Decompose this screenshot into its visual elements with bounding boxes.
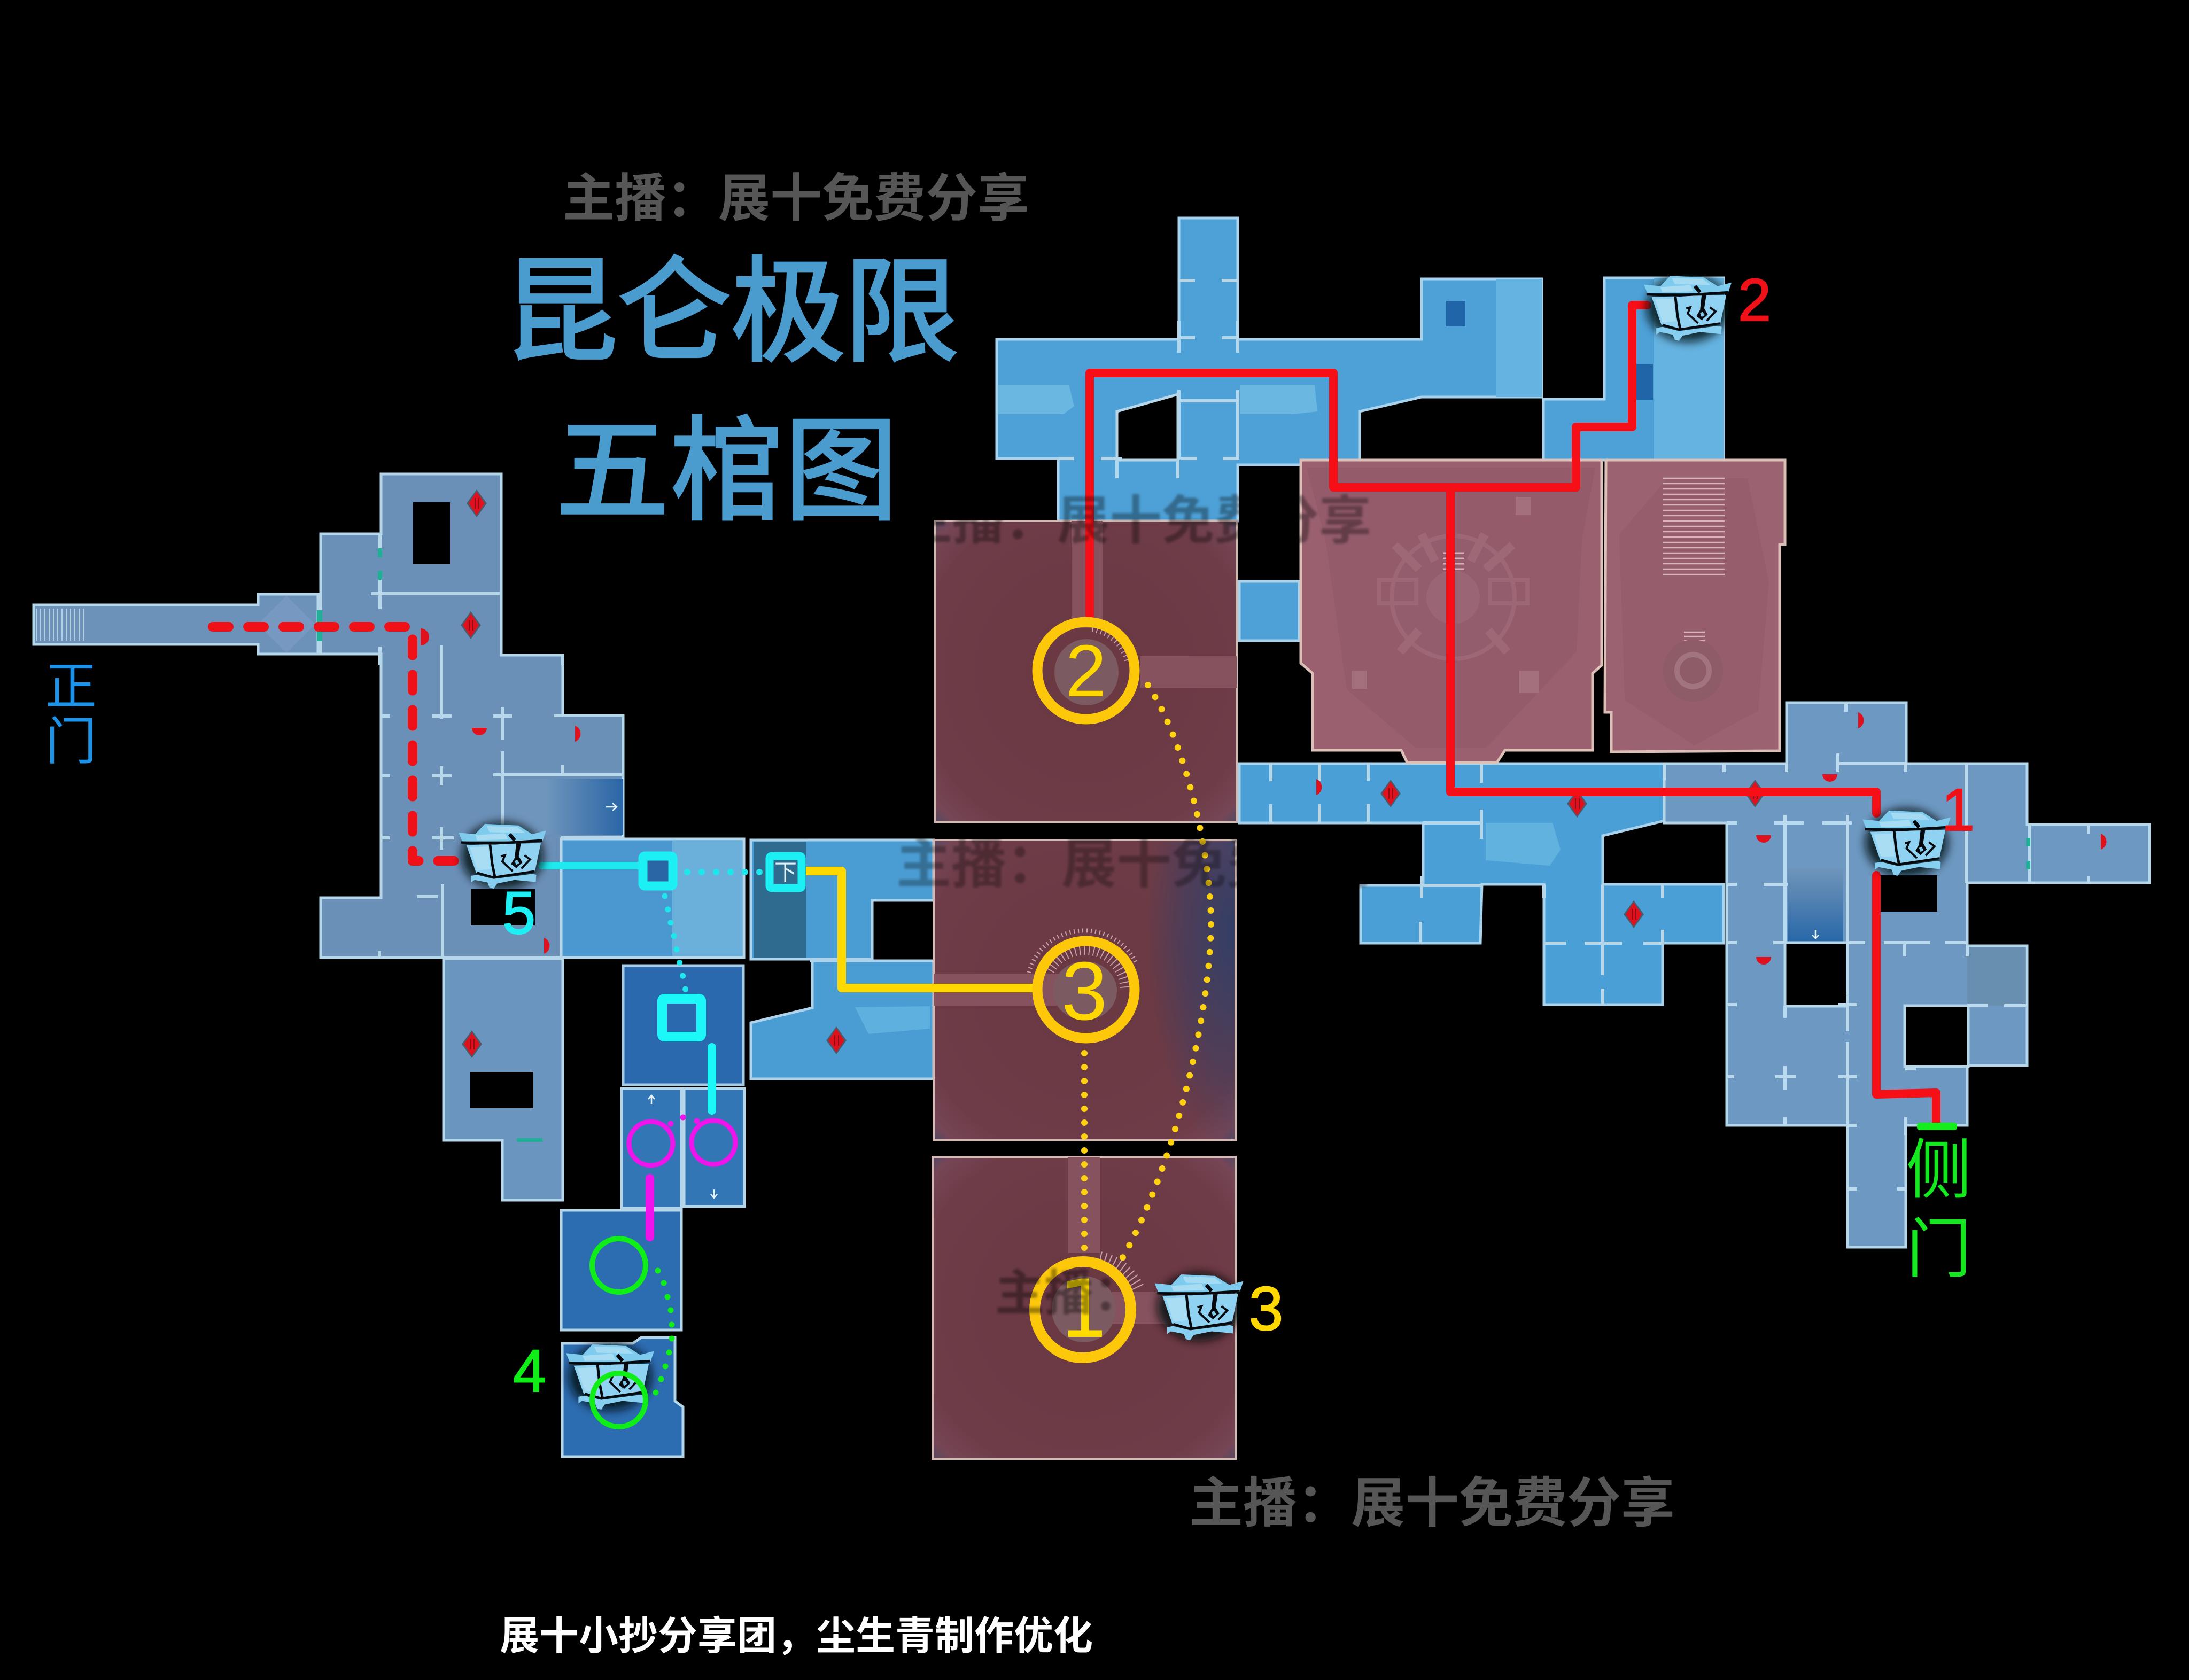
- label: main entrance: 门: [45, 700, 97, 774]
- room: bottom chamber: [562, 1337, 683, 1457]
- small arrows: [648, 1095, 717, 1198]
- markers: red half circles: [421, 628, 2106, 965]
- left building: [34, 474, 625, 1200]
- marker: yellow circle two: 2: [1066, 630, 1106, 712]
- chest: number 4: [566, 1342, 654, 1411]
- number: chest 3: 3: [1249, 1274, 1283, 1343]
- label: side door: 门: [1906, 1196, 1971, 1291]
- markers: red diamonds: [461, 489, 1765, 1058]
- top blue wing: [997, 218, 1542, 521]
- title: line two: 五棺图: [556, 379, 898, 543]
- watermark: over upper rooms: 主播：展十免费分享: [900, 478, 1371, 554]
- chest: number 5: [459, 822, 546, 890]
- room: dark right tall: [684, 1088, 744, 1207]
- right slate wing: [1664, 703, 2149, 1247]
- markers: teal doors: [317, 548, 2030, 1142]
- marker: yellow circle three: 3: [1061, 945, 1107, 1037]
- credit line: 展十小抄分享团，尘生青制作优化: [500, 1604, 1093, 1661]
- route: cyan: [542, 854, 802, 1110]
- room: lower chamber: [561, 1210, 681, 1330]
- watermark: bottom right: 主播：展十免费分享: [1189, 1460, 1675, 1538]
- route: magenta: [629, 1115, 735, 1237]
- route: yellow dotted vertical: [1081, 1053, 1088, 1250]
- watermark: top: 主播：展十免费分享: [563, 156, 1029, 231]
- room: chamber one: [933, 1157, 1236, 1459]
- marker: yellow circle one: [1035, 1262, 1131, 1358]
- cyan square two: [662, 999, 701, 1037]
- room: small square between halls: [1239, 581, 1299, 641]
- title: line one: 昆仑极限: [503, 219, 959, 385]
- corridor: right light wing: [1239, 764, 1724, 1005]
- label: main entrance: 正: [45, 645, 97, 719]
- number: chest 2: 2: [1738, 267, 1771, 333]
- route: red dashed main entrance: [213, 627, 470, 861]
- marker: yellow circle one: 1: [1058, 1263, 1109, 1356]
- room: chamber three: [934, 840, 1236, 1140]
- route: green: [592, 1239, 674, 1427]
- marker: yellow circle three: [1037, 941, 1135, 1038]
- number: chest 4: 4: [513, 1337, 546, 1404]
- cyan square three with label: 下: [774, 854, 797, 887]
- route: yellow solid: [806, 871, 1034, 988]
- chest: number 1: [1862, 808, 1951, 877]
- watermark: over lower room: 主播：: [995, 1254, 1143, 1325]
- route: yellow dotted curve: [1121, 685, 1211, 1261]
- hall: east red hall: [1605, 460, 1785, 752]
- number: chest 1: 1: [1942, 776, 1975, 843]
- cyan square three with label: [770, 854, 802, 888]
- label: side door: [1906, 1117, 1971, 1291]
- route: red side door to chests: [1090, 305, 1936, 1123]
- label: side door: 侧: [1906, 1117, 1971, 1212]
- chest: number 3: [1154, 1272, 1244, 1341]
- room: chamber two: [935, 521, 1237, 822]
- room: stairs-down hall: [751, 840, 934, 1079]
- watermark: over middle room: 主播：展十免费分享: [896, 819, 1392, 899]
- hall: central red hall: [1301, 460, 1602, 763]
- cyan square one: [643, 856, 673, 886]
- room: upper right wing: [1543, 278, 1724, 460]
- icon: stairs: [36, 609, 83, 641]
- label: main entrance: [45, 645, 97, 774]
- number: chest 5: 5: [502, 880, 535, 946]
- room: light blue hall right of left building: [561, 839, 744, 958]
- room: dark left tall: [622, 1088, 681, 1208]
- green door bar: [1917, 1123, 1957, 1130]
- room: dark blue chamber: [623, 966, 743, 1085]
- chest: number 2: [1644, 274, 1732, 342]
- marker: yellow circle two: [1037, 622, 1135, 719]
